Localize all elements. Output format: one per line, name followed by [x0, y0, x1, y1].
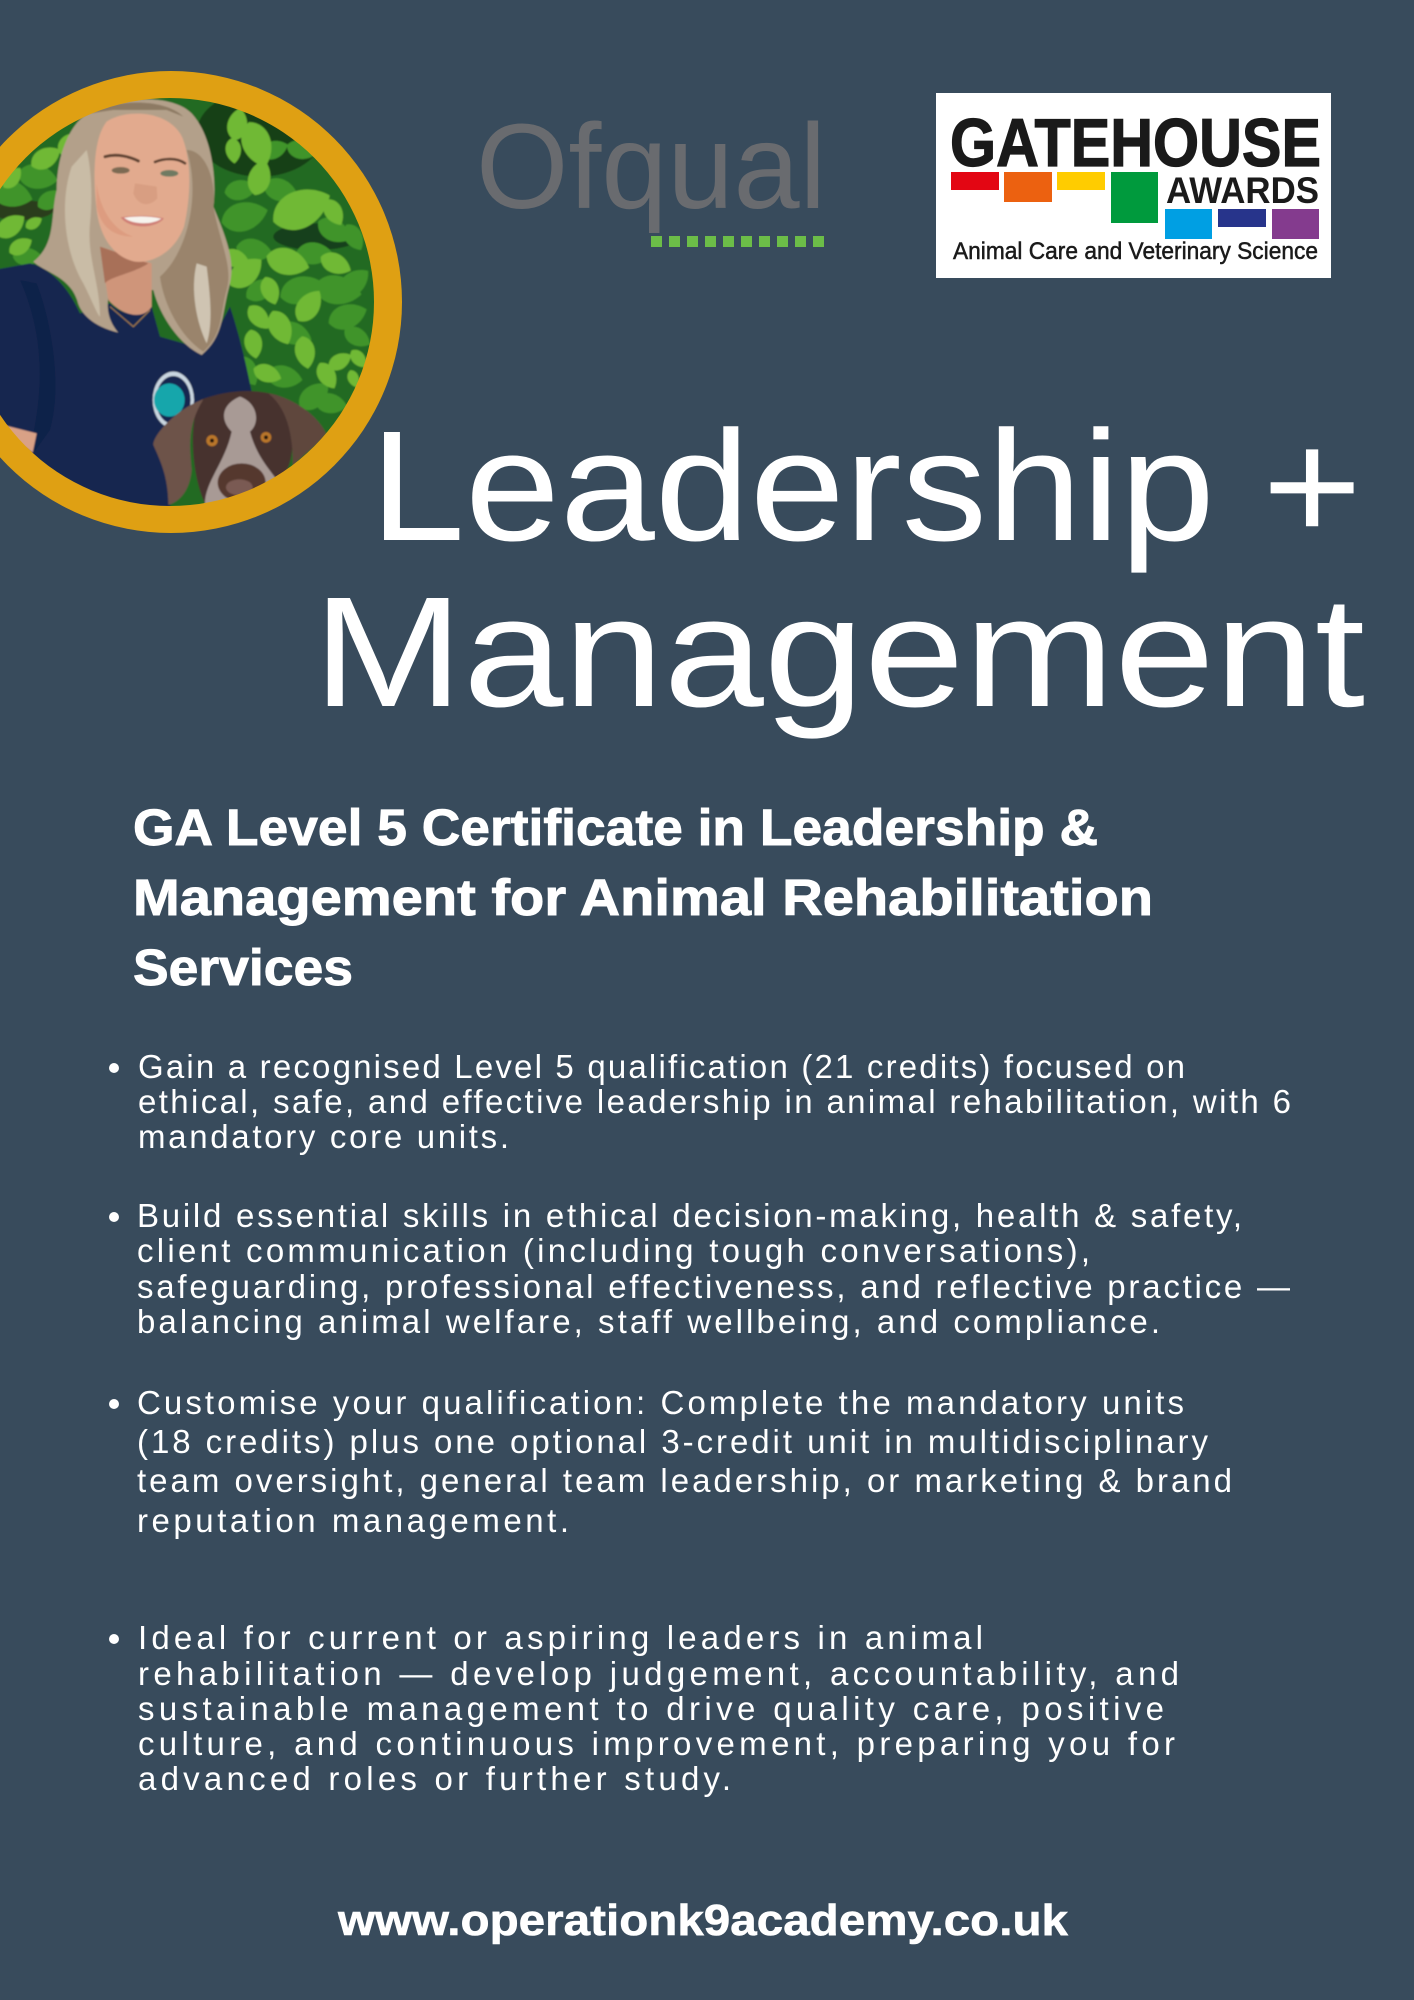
bullet 4: advanced roles or further study. [138, 1760, 731, 1797]
colour squares [951, 172, 1319, 239]
bullet 1: ethical, safe, and effective leadership in animal rehabilitation, with 6 [138, 1083, 1291, 1120]
bullet 3: Customise your qualification: Complete the mandatory units [137, 1384, 1184, 1421]
bullet 4 [109, 1619, 1179, 1797]
bullet 2 [109, 1197, 1290, 1340]
title: Management [313, 565, 1365, 740]
subtitle heading [133, 799, 1153, 996]
Ofqual wordmark: Ofqual [476, 98, 826, 234]
dog head [193, 391, 293, 507]
neck [106, 262, 153, 316]
subtitle heading: GA Level 5 Certificate in Leadership & [133, 799, 1098, 856]
bullet 2: client communication (including tough conversations), [137, 1232, 1090, 1269]
shirt badge [153, 372, 194, 428]
face [95, 114, 189, 262]
hair [33, 99, 231, 355]
photo: woman and dog in front of green leaves [0, 83, 387, 517]
bullet 4: culture, and continuous improvement, preparing you for [138, 1725, 1175, 1762]
bullet 3: (18 credits) plus one optional 3-credit unit in multidisciplinary [137, 1423, 1208, 1460]
bullet 3: team oversight, general team leadership, or marketing & brand [137, 1462, 1232, 1499]
Gatehouse Awards logo [936, 93, 1331, 278]
bullet 3 [109, 1384, 1232, 1539]
arm skin [7, 424, 38, 454]
bullet 4: Ideal for current or aspiring leaders in animal [138, 1619, 983, 1656]
white logo panel [936, 93, 1331, 278]
bullet 2: balancing animal welfare, staff wellbeing, and compliance. [137, 1303, 1160, 1340]
smile [121, 216, 164, 226]
AWARDS wordmark: AWARDS [1166, 170, 1319, 211]
bullet 1: mandatory core units. [138, 1118, 509, 1155]
title [313, 399, 1365, 740]
subtitle heading: Services [133, 939, 353, 996]
subtitle heading: Management for Animal Rehabilitation [133, 869, 1153, 926]
bullet 3: reputation management. [137, 1502, 569, 1539]
bullet 1: Gain a recognised Level 5 qualification (21 credits) focused on [138, 1048, 1185, 1085]
t-shirt [0, 263, 252, 510]
green dotted bar [651, 236, 824, 247]
bullet 4: rehabilitation — develop judgement, accountability, and [138, 1655, 1179, 1692]
gold ring [0, 71, 402, 533]
circular portrait photo with gold ring [0, 71, 402, 533]
logo strapline: Animal Care and Veterinary Science [953, 238, 1318, 265]
website URL: www.operationk9academy.co.uk [337, 1896, 1069, 1945]
GATEHOUSE wordmark: GATEHOUSE [950, 105, 1321, 181]
bullet 1 [109, 1048, 1291, 1155]
bullet 2: Build essential skills in ethical decision-making, health & safety, [137, 1197, 1242, 1234]
Ofqual logo [476, 98, 826, 247]
title: Leadership + [370, 399, 1362, 574]
bullet 4: sustainable management to drive quality care, positive [138, 1690, 1164, 1727]
bullet 2: safeguarding, professional effectiveness, and reflective practice — [137, 1268, 1290, 1305]
